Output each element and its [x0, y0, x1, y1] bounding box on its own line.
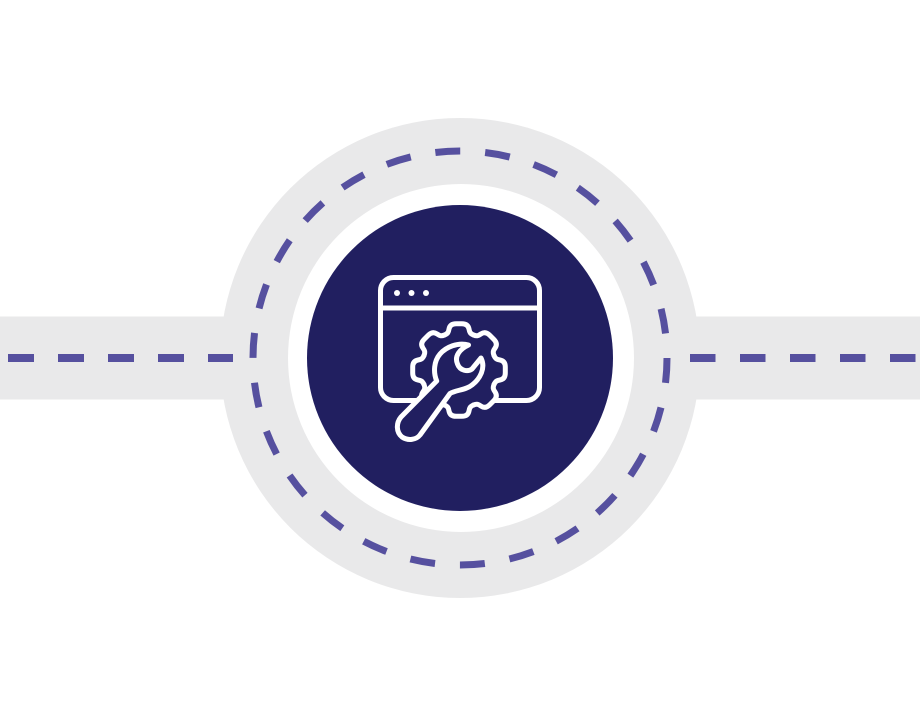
road band: horizontal grey road — [0, 316, 920, 400]
icon: gear — [413, 324, 505, 416]
road ring: outer grey circle — [220, 118, 700, 598]
navy centre circle — [307, 205, 613, 511]
dashes: left road lane markings — [8, 354, 233, 362]
icon: window dots — [394, 290, 429, 296]
inner white circle — [288, 184, 634, 532]
icon: window header line — [380, 306, 540, 310]
dashes: right road lane markings — [690, 354, 916, 362]
icon: browser window frame — [380, 278, 540, 400]
dashed ring: lane markings — [253, 151, 667, 565]
icon: browser window with gear and wrench — [380, 278, 540, 439]
icon: wrench — [397, 344, 483, 439]
